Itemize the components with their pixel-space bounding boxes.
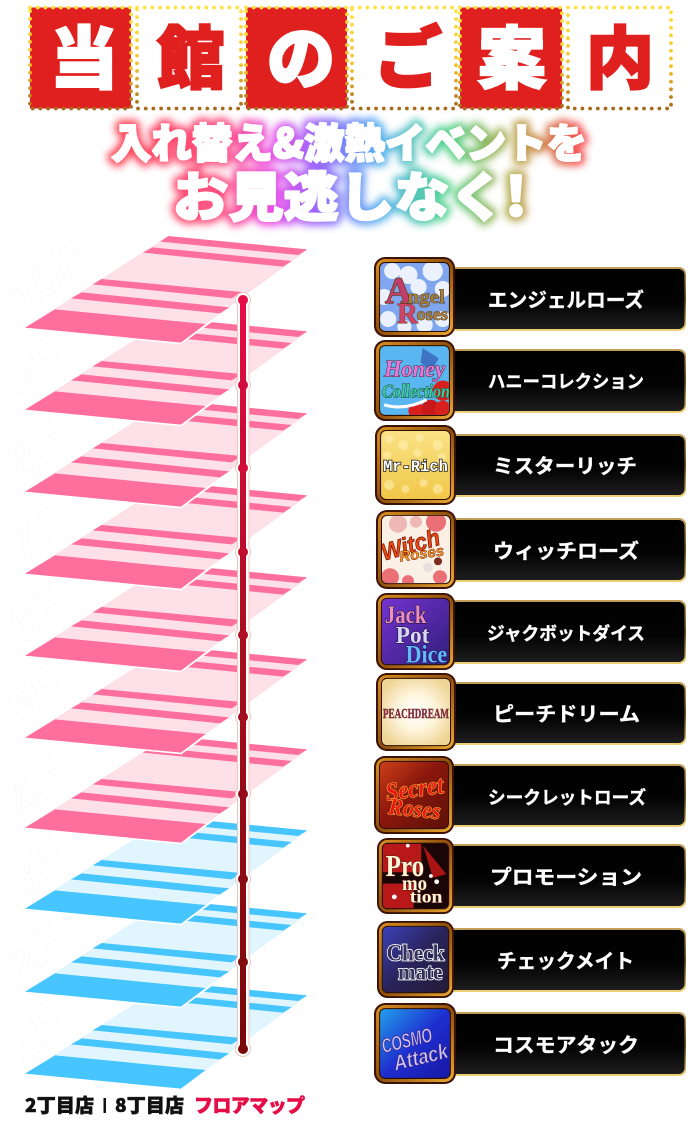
floor map: stacked floor plates bbox=[0, 227, 310, 1089]
row 1: エンジェルローズ bbox=[374, 257, 686, 337]
icon: Check mate bbox=[377, 921, 454, 998]
caption: floor map bbox=[25, 1091, 305, 1118]
subtitle with rainbow glow: お見逃しなく! bbox=[173, 156, 527, 232]
row 6: ピーチドリーム: ピーチドリーム bbox=[493, 703, 640, 726]
tile: 案 bbox=[460, 4, 562, 108]
icon: Angel Roses: oses bbox=[417, 304, 448, 324]
icon: Angel Roses: R bbox=[397, 299, 418, 330]
icon: Jack Pot Dice: Dice bbox=[406, 641, 447, 668]
icon: Jack Pot Dice bbox=[376, 593, 455, 670]
icon: Secret Roses: Roses bbox=[386, 794, 442, 825]
icon: Secret Roses: Secret bbox=[384, 770, 446, 807]
icon: Peach Dream bbox=[376, 673, 456, 751]
row 4: ウィッチローズ bbox=[376, 510, 686, 589]
tile: の: の bbox=[267, 4, 335, 103]
icon: Promotion: mo bbox=[402, 871, 427, 895]
icon: Angel Roses: A bbox=[385, 271, 412, 312]
icon: Honey Collection bbox=[374, 340, 455, 421]
icon: Witch Roses: Roses bbox=[398, 544, 445, 566]
tile: 当 bbox=[30, 4, 131, 108]
icon: Witch Roses bbox=[376, 510, 456, 589]
row 3: ミスターリッチ bbox=[375, 425, 686, 505]
icon: Peach Dream: PEACHDREAM bbox=[383, 706, 449, 721]
tile: 内 bbox=[568, 4, 671, 108]
icon: Honey Collection: Honey bbox=[383, 356, 446, 382]
icon: Cosmo Attack: COSMO bbox=[380, 1025, 435, 1058]
subtitle with rainbow glow: 入れ替え&激熱イベントを bbox=[111, 110, 587, 170]
tile: の bbox=[246, 4, 347, 108]
row 1: エンジェルローズ: エンジェルローズ bbox=[488, 288, 644, 312]
row 10: コスモアタック: コスモアタック bbox=[493, 1034, 639, 1057]
caption: floor map: 2丁目店 bbox=[25, 1091, 94, 1118]
row 3: ミスターリッチ: ミスターリッチ bbox=[493, 455, 637, 478]
icon: Honey Collection: Collection bbox=[382, 382, 450, 403]
elevator line with floor nodes bbox=[235, 292, 251, 1057]
icon: Angel Roses bbox=[374, 257, 455, 337]
icon: Secret Roses bbox=[374, 756, 454, 834]
icon: Jack Pot Dice: Pot bbox=[396, 622, 429, 649]
tile: 案: 案 bbox=[478, 4, 546, 103]
icon: Check mate: mate bbox=[398, 959, 442, 985]
caption: floor map: フロアマップ bbox=[194, 1091, 305, 1118]
tile: 当: 当 bbox=[50, 4, 118, 103]
tile: 館: 館 bbox=[157, 4, 225, 103]
tile: ご: ご bbox=[374, 4, 442, 103]
row 5: ジャクボットダイス: ジャクボットダイス bbox=[487, 623, 645, 644]
row 9: チェックメイト bbox=[377, 921, 686, 998]
icon: Cosmo Attack bbox=[374, 1003, 456, 1084]
subtitle with rainbow glow: お見逃しなく! bbox=[173, 156, 527, 232]
subtitle with rainbow glow bbox=[111, 110, 587, 232]
caption: floor map: 8丁目店 bbox=[115, 1091, 184, 1118]
icon: Promotion: Pro bbox=[386, 849, 424, 883]
subtitle with rainbow glow: 入れ替え&激熱イベントを bbox=[111, 110, 587, 170]
row 2: ハニーコレクション: ハニーコレクション bbox=[488, 372, 644, 392]
icon: Promotion bbox=[377, 838, 454, 914]
tile: 館 bbox=[137, 4, 241, 108]
tile: 内: 内 bbox=[586, 4, 654, 103]
icon: Mr-Rich bbox=[375, 425, 456, 505]
row 8: プロモーション bbox=[377, 838, 686, 914]
icon: Mr-Rich: Mr-Rich bbox=[383, 458, 448, 476]
icon: Cosmo Attack: Attack bbox=[390, 1039, 451, 1076]
row 5: ジャクボットダイス bbox=[376, 593, 686, 670]
icon: Check mate: Check bbox=[387, 939, 445, 965]
icon: Promotion: tion bbox=[410, 887, 442, 907]
icon: Witch Roses: Witch bbox=[378, 524, 443, 566]
tile: ご bbox=[352, 4, 456, 108]
title: 当館のご案内 bbox=[30, 4, 671, 108]
row 10: コスモアタック bbox=[374, 1003, 686, 1084]
row 9: チェックメイト: チェックメイト bbox=[497, 950, 634, 973]
row 7: シークレットローズ bbox=[374, 756, 686, 834]
icon: Angel Roses: ngel bbox=[407, 287, 445, 308]
icon: Jack Pot Dice: Jack bbox=[385, 601, 427, 629]
row 7: シークレットローズ: シークレットローズ bbox=[488, 787, 646, 808]
row 2: ハニーコレクション bbox=[374, 340, 686, 421]
row 6: ピーチドリーム bbox=[376, 673, 686, 751]
row 8: プロモーション: プロモーション bbox=[490, 866, 642, 889]
row 4: ウィッチローズ: ウィッチローズ bbox=[493, 539, 639, 563]
